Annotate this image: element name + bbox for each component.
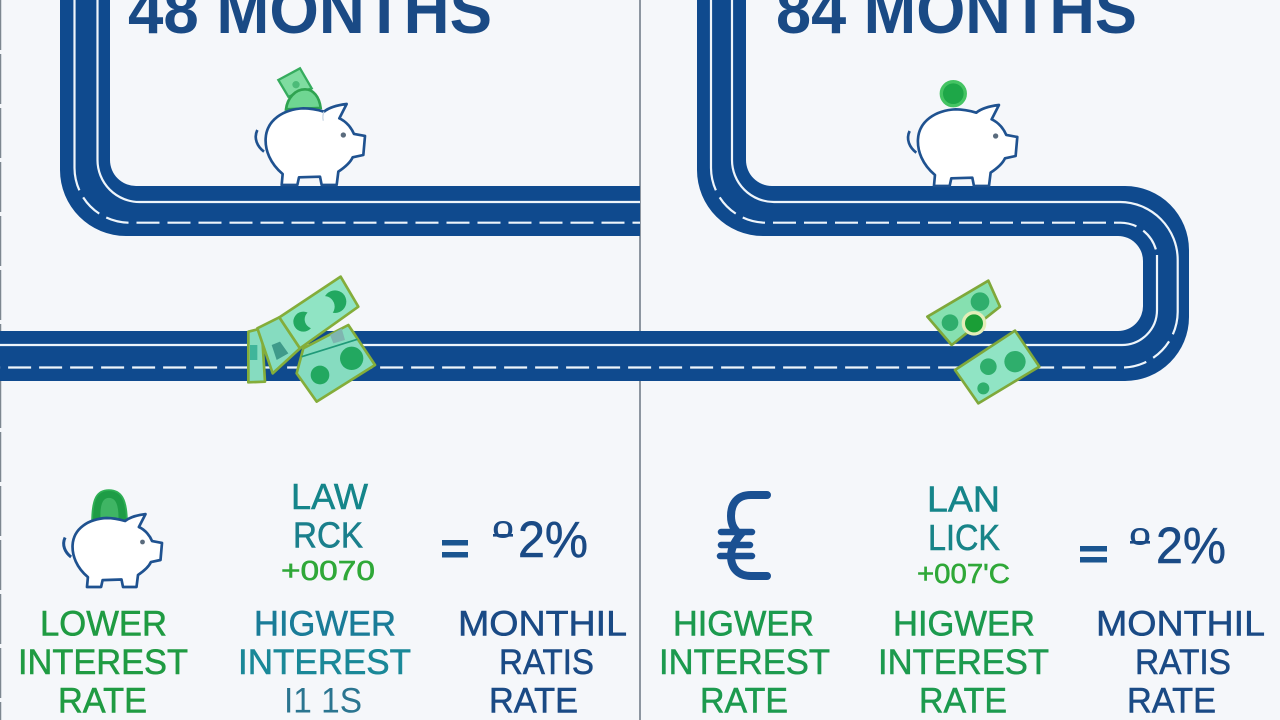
- label: lower interest rate: [18, 605, 188, 720]
- label: higher interest rate, second column: HIGWER: [893, 605, 1035, 644]
- icon: euro currency symbol: [720, 495, 767, 576]
- label: monthly rate: [458, 605, 627, 720]
- panel: 48 month summary: [18, 476, 627, 720]
- text: rate percent: º: [1130, 520, 1150, 569]
- text: loan risk figure: [281, 476, 375, 586]
- icon: banknotes on road, 48 months: [248, 277, 375, 402]
- road: 48 month road: [60, 0, 640, 236]
- road: lower lane across both panels, looping up to the 84 month road: [0, 0, 1189, 381]
- label: higher interest rate, second column: [878, 605, 1049, 720]
- label: lower interest rate: RATE: [58, 682, 147, 720]
- label: higher interest rate, first column: HIGWER: [673, 605, 814, 644]
- label: monthly rate: RATIS: [499, 643, 594, 682]
- text: loan risk figure: [917, 479, 1010, 589]
- text: loan risk figure: +0070: [281, 555, 375, 586]
- label: lower interest rate: INTEREST: [18, 643, 188, 682]
- label: monthly rate: RATE: [489, 682, 578, 720]
- label: higher interest rate, second column: INTEREST: [878, 643, 1049, 682]
- icon: equals sign: [1080, 546, 1107, 562]
- label: monthly rate: MONTHIL: [458, 605, 627, 644]
- panel: 84 month summary: [659, 479, 1265, 720]
- text: loan risk figure: +007'C: [917, 558, 1010, 589]
- label: higher interest: I1 1S: [284, 682, 362, 720]
- label: lower interest rate: LOWER: [40, 605, 167, 644]
- label: higher interest: INTEREST: [238, 643, 411, 682]
- icon: piggy bank with cash, 48 months: [256, 68, 365, 185]
- label: monthly rate: MONTHIL: [1096, 605, 1265, 644]
- label: higher interest rate, first column: RATE: [700, 682, 788, 720]
- text: loan risk figure: RCK: [293, 515, 363, 556]
- label: higher interest rate, second column: RATE: [919, 682, 1007, 720]
- icon: equals sign: [442, 540, 468, 558]
- text: rate percent: 2%: [518, 511, 588, 568]
- icon: piggy bank with coin: [64, 490, 162, 587]
- icon: banknotes and coin on road, 84 months: [927, 281, 1039, 403]
- label: monthly rate: [1096, 605, 1265, 720]
- label: higher interest: [238, 605, 411, 720]
- label: higher interest rate, first column: INTEREST: [659, 643, 830, 682]
- label: higher interest: HIGWER: [254, 605, 396, 644]
- text: rate percent: º: [493, 513, 513, 562]
- text: rate percent: 2%: [1156, 517, 1226, 574]
- text: loan risk figure: LICK: [928, 517, 1000, 558]
- label: monthly rate: RATIS: [1135, 643, 1231, 682]
- text: loan risk figure: LAW: [291, 476, 368, 517]
- label: higher interest rate, first column: [659, 605, 830, 720]
- icon: piggy bank with coin, 84 months: [908, 82, 1017, 186]
- text: loan risk figure: LAN: [927, 479, 1000, 520]
- label: monthly rate: RATE: [1127, 682, 1216, 720]
